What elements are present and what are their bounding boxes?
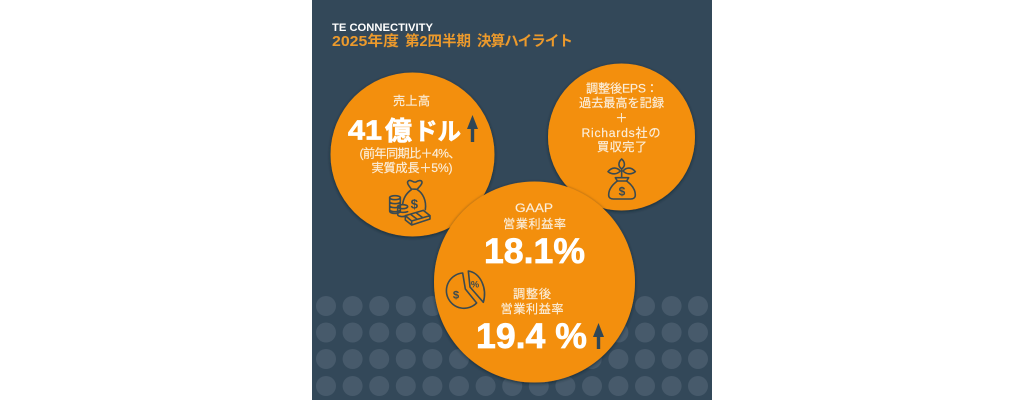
revenue figure: ドル [414, 118, 461, 146]
panel: operating margin circle: 営業利益率 [500, 302, 564, 316]
icon: plant in money bag: $ [619, 185, 626, 199]
panel: revenue circle [330, 72, 494, 236]
panel: EPS circle [548, 64, 695, 210]
panel: operating margin circle: 営業利益率 [503, 217, 566, 231]
dark background panel [312, 0, 712, 400]
panel: revenue circle: (前年同期比＋4%、 [360, 146, 460, 160]
heading: 2025年度 [332, 32, 400, 50]
heading: 決算ハイライト [477, 32, 573, 50]
panel: operating margin circle [434, 182, 635, 382]
icon: money bag [390, 180, 430, 225]
panel: operating margin circle: 調整後 [513, 287, 551, 301]
panel: revenue circle: 売上高 [393, 93, 430, 108]
heading: 第2四半期 [405, 32, 471, 50]
icon: pie chart: % [471, 279, 480, 289]
revenue figure [348, 114, 461, 146]
panel: operating margin circle: 18.1% [484, 232, 585, 271]
revenue figure: 41 [348, 114, 382, 146]
icon: money bag: $ [411, 196, 419, 211]
panel: EPS circle: 過去最高を記録 [579, 96, 664, 110]
panel: EPS circle: Richards社の [582, 125, 660, 140]
panel: revenue circle: 実質成長＋5%) [372, 160, 452, 175]
icon: up arrow [593, 323, 604, 349]
panel: EPS circle: 買収完了 [597, 140, 647, 154]
revenue figure: 億 [385, 116, 412, 146]
heading [332, 22, 573, 50]
heading: TE CONNECTIVITY [332, 22, 434, 34]
panel: operating margin circle: GAAP [515, 201, 553, 215]
dot pattern [316, 296, 708, 396]
panel: EPS circle: 調整後EPS： [586, 82, 658, 96]
icon: up arrow [467, 115, 478, 142]
panel: operating margin circle: 19.4 % [476, 317, 587, 356]
icon: pie chart [446, 271, 484, 308]
icon: pie chart: $ [453, 289, 460, 301]
icon: plant in money bag [608, 159, 635, 199]
panel: EPS circle: ＋ [615, 111, 628, 125]
